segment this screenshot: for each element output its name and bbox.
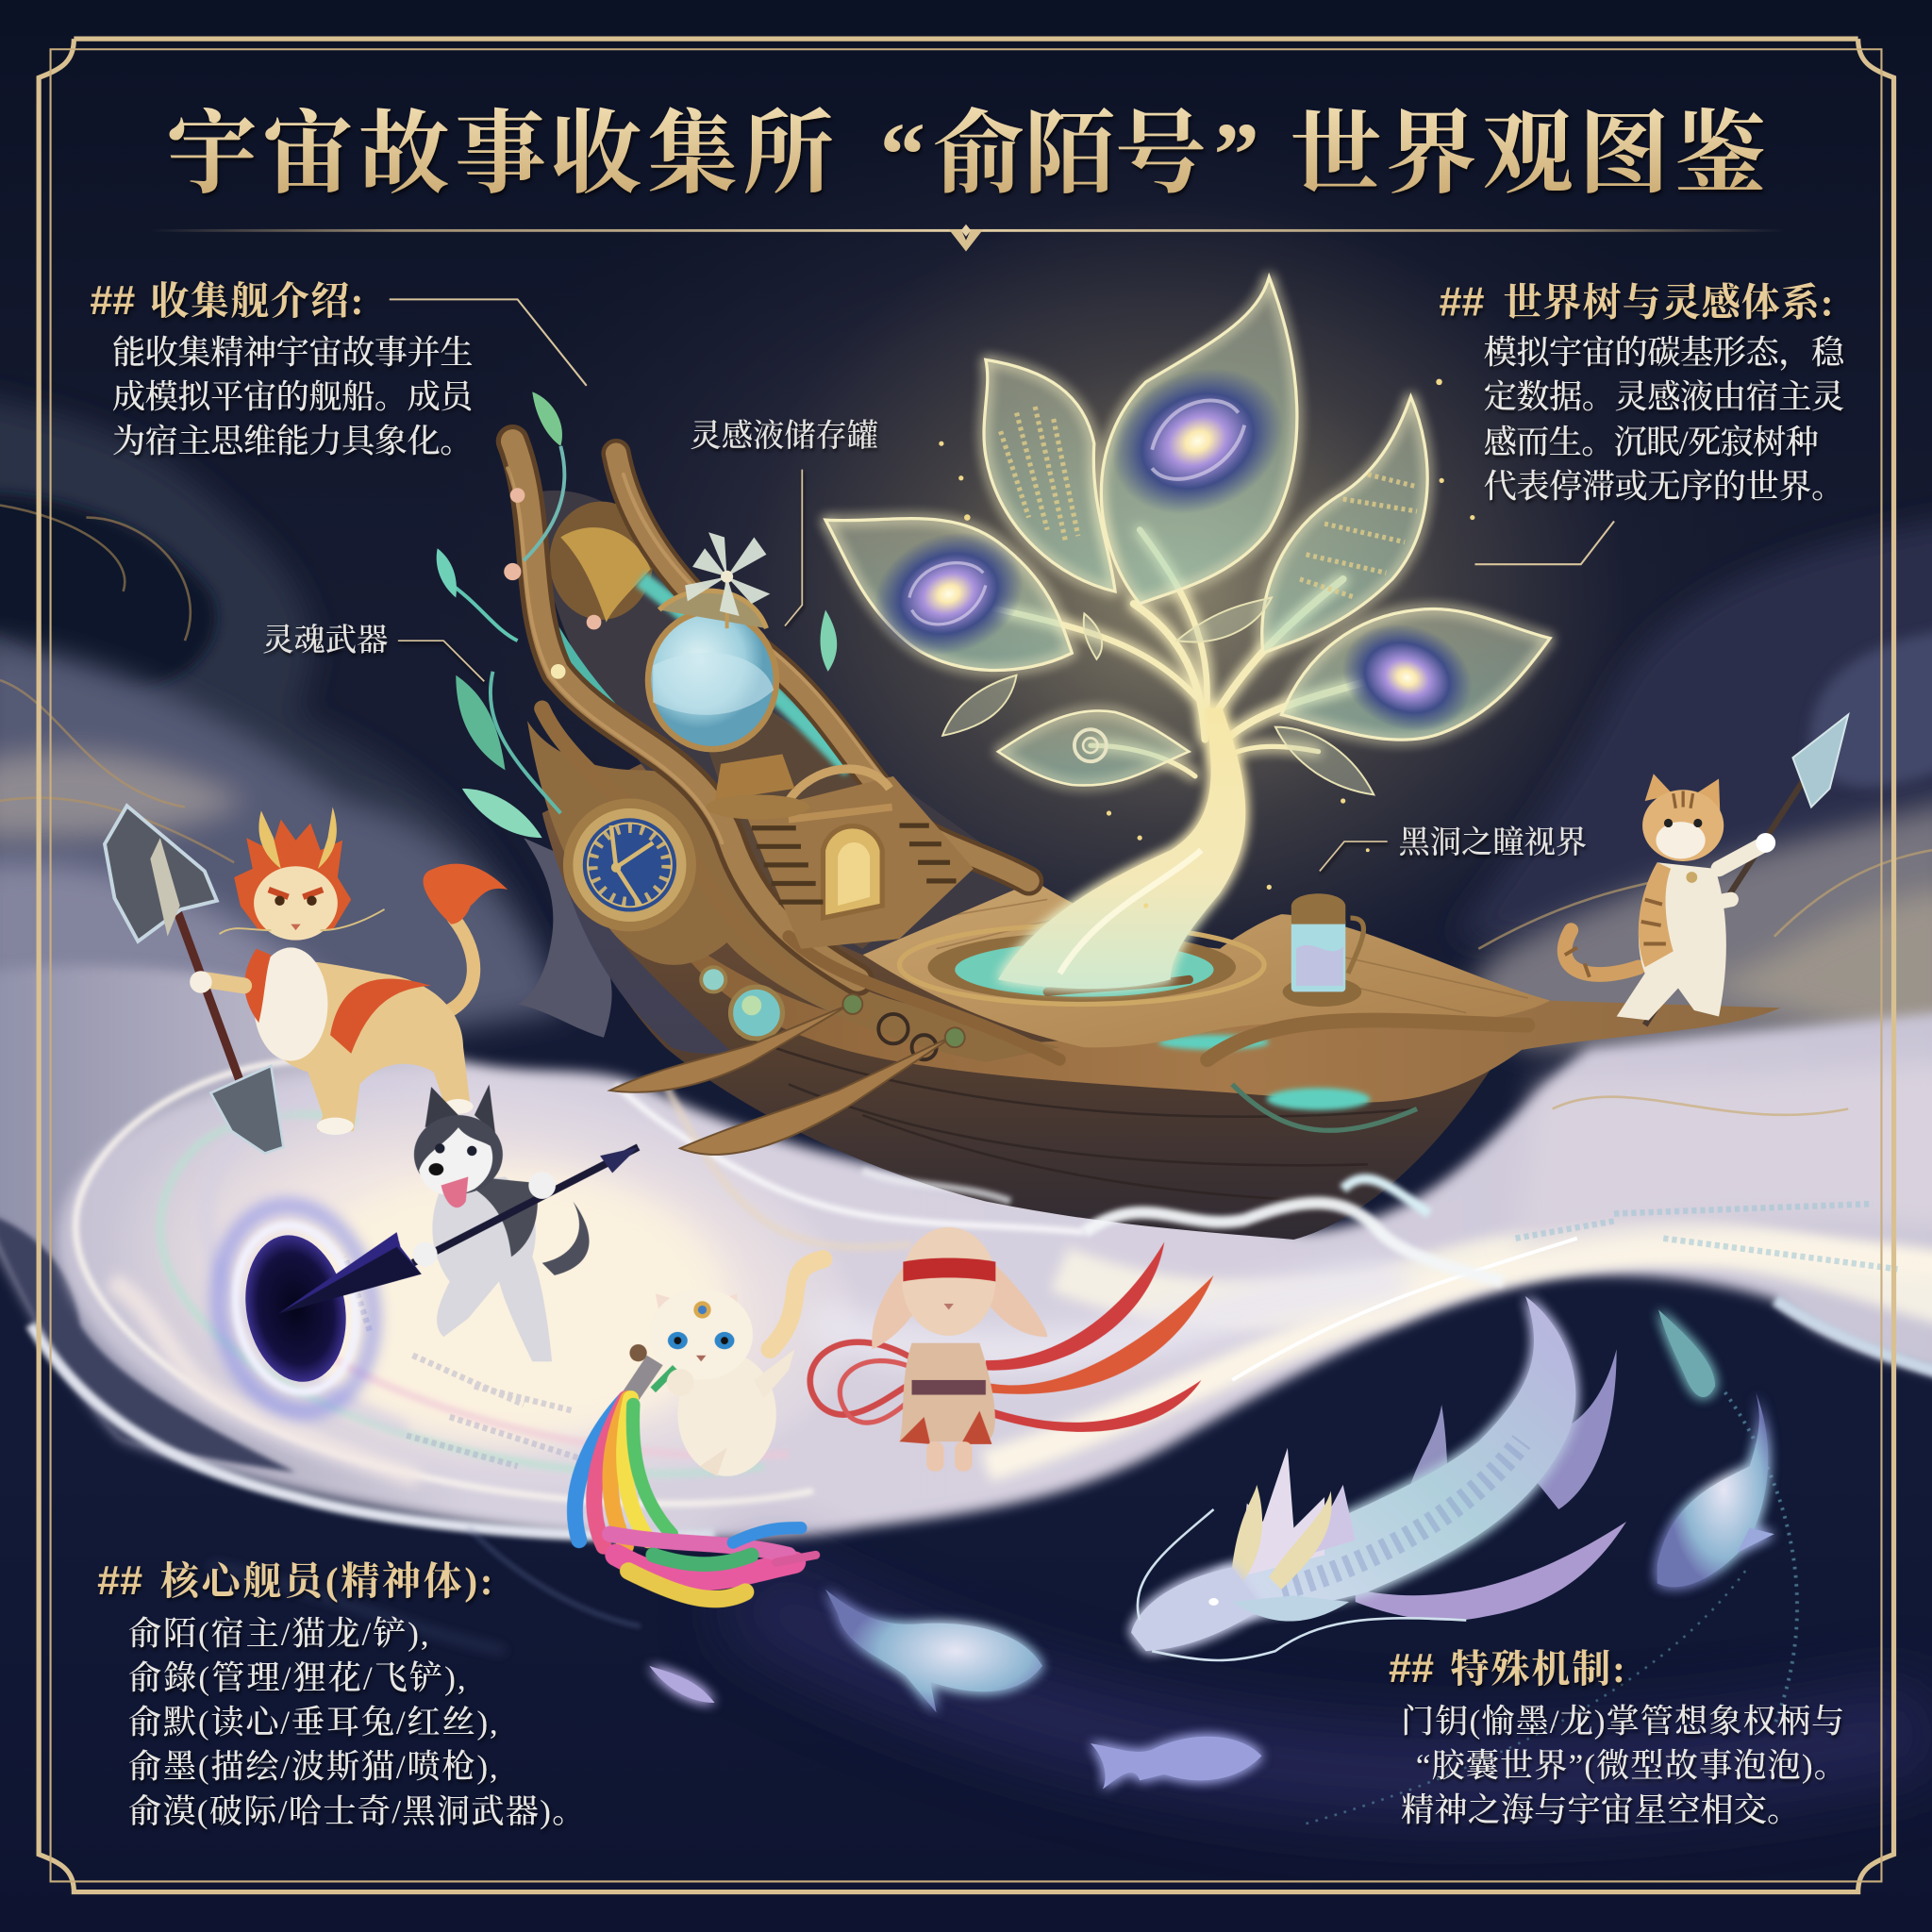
stern interior: [532, 491, 1035, 955]
teal stern lining: [641, 579, 850, 770]
panel: world tree and inspiration: [1440, 279, 1846, 506]
leader line: ship introduction: [390, 299, 587, 386]
ship rear fin: [518, 838, 612, 1038]
panel: world tree and inspiration: 模拟宇宙的碳基形态，稳: [1484, 334, 1846, 371]
leaf: swirl: [998, 710, 1189, 786]
head: [425, 1084, 495, 1134]
rainbow paint stream: [575, 1398, 816, 1599]
panel: core crew: 俞漠(破际/哈士奇/黑洞武器)。: [128, 1793, 585, 1830]
deck: [850, 881, 1550, 1047]
label: soul weapon: 灵魂武器: [262, 624, 388, 658]
stern side wood mass: [527, 721, 1059, 1062]
label: soul weapon: [262, 624, 484, 681]
panel: core crew: ##: [97, 1558, 142, 1604]
world tree: [825, 277, 1550, 989]
panel: special mechanisms: ##: [1389, 1646, 1434, 1691]
label: black hole eye horizon: 黑洞之瞳视界: [1398, 825, 1587, 860]
oars: [610, 994, 965, 1155]
black hole: [203, 1193, 389, 1424]
fish: tiny: [649, 1666, 715, 1703]
panel: core crew: 俞錄(管理/狸花/飞铲),: [128, 1660, 466, 1697]
leaf: top galaxy: [1088, 277, 1307, 604]
spear: [413, 1147, 639, 1263]
teal inlays: [1124, 1026, 1417, 1130]
fish: small top: [1658, 1309, 1715, 1397]
character: 俞默 blindfold rabbit with red silk: [810, 1227, 1214, 1472]
dragon 愉墨: [1131, 1296, 1626, 1660]
cabin with door and stairs: [745, 769, 974, 949]
panel: core crew: 俞默(读心/垂耳兔/红丝),: [128, 1705, 498, 1741]
panel: ship introduction: [90, 278, 476, 459]
spirit sea mist swirl: [0, 966, 1932, 1540]
panel: world tree and inspiration: 世界树与灵感体系:: [1503, 280, 1834, 324]
panel: ship introduction: ##: [90, 278, 135, 324]
robe: [899, 1343, 995, 1441]
tank flower: [685, 532, 770, 616]
panel: core crew: 俞墨(描绘/波斯猫/喷枪),: [128, 1749, 498, 1786]
panel: special mechanisms: [1389, 1646, 1847, 1828]
character: 俞錄 tabby cat on prow: [1565, 715, 1848, 1025]
panel: world tree and inspiration: ##: [1440, 279, 1485, 325]
panel: spirit sea dark water streaks: [209, 1392, 1932, 1824]
tree basin on deck: [899, 925, 1264, 1004]
panel: special mechanisms: 门钥(愉墨/龙)掌管想象权柄与: [1401, 1703, 1844, 1740]
panel: world tree and inspiration: 感而生。沉眠/死寂树种: [1484, 425, 1819, 461]
leaf: upper left script: [984, 359, 1115, 591]
tail: [542, 1201, 590, 1275]
tree trunk: [998, 708, 1245, 989]
leaf: left galaxy: [825, 512, 1072, 675]
vines with leaves on stern: [437, 391, 837, 838]
panel: ship introduction: 能收集精神宇宙故事并生: [112, 334, 474, 371]
panel: ship introduction: 成模拟平宙的舰船。成员: [112, 378, 476, 415]
background ink wisps: [0, 394, 1932, 1109]
panel: world tree and inspiration: 代表停滞或无序的世界。: [1484, 469, 1844, 506]
panel: special mechanisms: “胶囊世界”(微型故事泡泡)。: [1416, 1747, 1847, 1784]
fish: lower left large: [825, 1590, 1042, 1713]
title: [166, 104, 1771, 205]
title divider: [148, 225, 1787, 251]
liquid storage tank: [648, 532, 809, 820]
title: 俞陌号: [933, 104, 1207, 205]
ribbons: [974, 1242, 1214, 1432]
tail with flame: [434, 918, 474, 1017]
ship rails: [508, 441, 1528, 1059]
ship clock: [563, 798, 696, 931]
title: 宇宙故事收集所: [166, 104, 839, 205]
hull plank lines: [740, 1035, 1417, 1201]
leaf: right script: [1262, 397, 1427, 653]
character: 俞墨 persian cat with paint sprayer: [623, 1259, 823, 1476]
panel: special mechanisms: 精神之海与宇宙星空相交。: [1401, 1791, 1800, 1828]
hourglass on deck: [1283, 893, 1363, 1007]
spirit fish: [649, 1309, 1774, 1789]
panel: special mechanisms: 特殊机制:: [1450, 1647, 1625, 1690]
label: inspiration tank: [690, 419, 878, 626]
ship hull: [542, 764, 1497, 1240]
title: ”: [1214, 104, 1264, 205]
label: inspiration tank: 灵感液储存罐: [690, 419, 878, 454]
label: black hole eye horizon: [1320, 825, 1587, 871]
mane and head: [234, 820, 351, 930]
panel: world tree and inspiration: 定数据。灵感液由宿主灵: [1484, 378, 1844, 415]
fish: bottom: [1091, 1737, 1261, 1789]
title: “: [880, 104, 930, 205]
fish: large right: [1657, 1392, 1768, 1587]
leader line: world tree: [1474, 521, 1614, 564]
panel: core crew: 核心舰员(精神体):: [160, 1559, 492, 1604]
character: 俞漠 husky with black hole spear: [278, 1084, 639, 1361]
ears: [872, 1251, 930, 1349]
ship: 俞陌号 collector vessel: [437, 391, 1780, 1240]
panel: core crew: [97, 1558, 585, 1830]
water splash over hull: [862, 1171, 1503, 1281]
ship portholes: [701, 967, 782, 1039]
leaf: right galaxy: [1281, 607, 1550, 749]
body: [432, 1176, 552, 1361]
ornament gears on side: [878, 1014, 937, 1059]
hull side band: [665, 924, 1780, 1103]
character: 俞陌 cat-dragon with spade: [105, 806, 508, 1154]
paint sprayer: [623, 1356, 663, 1401]
gold sparks: [939, 379, 1474, 908]
panel: ship introduction: 收集舰介绍:: [150, 279, 363, 323]
panel: core crew: 俞陌(宿主/猫龙/铲),: [128, 1616, 429, 1653]
title: 世界观图鉴: [1291, 104, 1771, 205]
tree branches: [974, 530, 1417, 776]
panel: ship introduction: 为宿主思维能力具象化。: [112, 423, 474, 459]
tree glow: [740, 197, 1626, 986]
stern figurehead panel: [550, 502, 653, 623]
body: [254, 959, 471, 1131]
small leaves: [942, 597, 1374, 794]
